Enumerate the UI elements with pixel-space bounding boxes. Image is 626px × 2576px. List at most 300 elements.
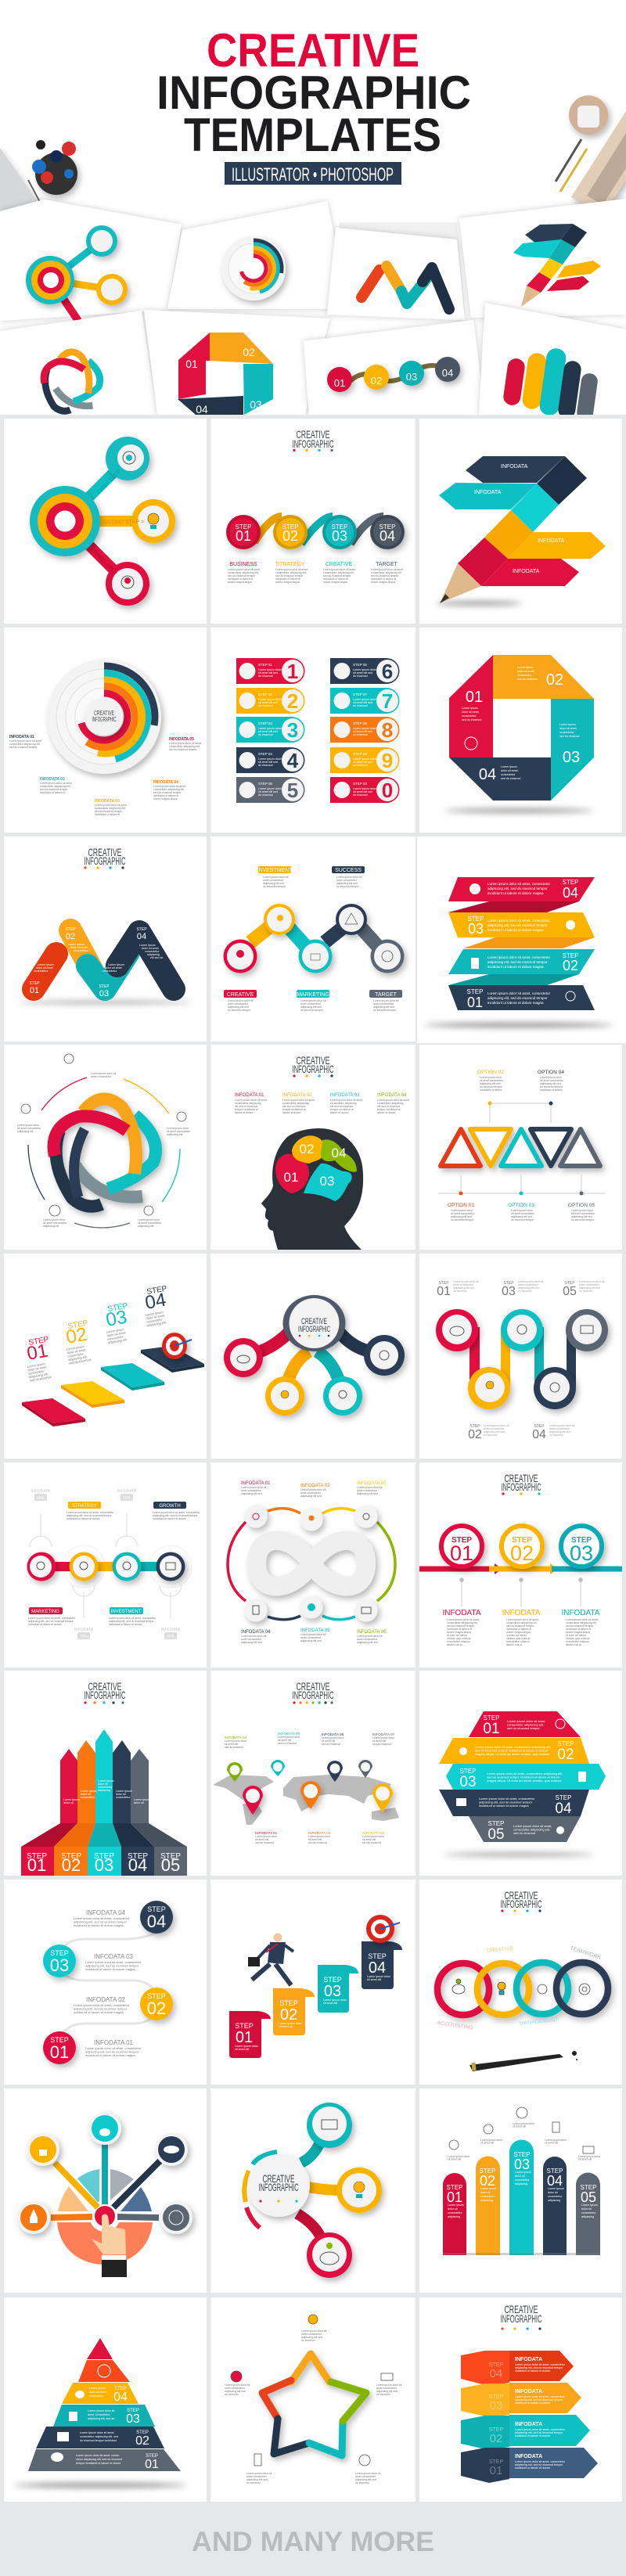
left pills: STEP 01 xyxy=(258,663,272,667)
step 02: 02 xyxy=(563,958,578,973)
layer 02: magna aliqua. Ut enim ad minim veniam, quis nostrud xyxy=(475,1752,549,1756)
level 04: 04 xyxy=(113,2391,128,2404)
location notes: sit amet elit xyxy=(308,1838,322,1841)
location notes: INFODATA 06 xyxy=(322,1732,344,1736)
infodata notes: INFODATA 05 xyxy=(300,1628,330,1633)
step labels: STEP xyxy=(564,1281,575,1286)
dark block: consectetur xyxy=(501,773,516,776)
column notes: tempor incididunt ut xyxy=(377,1108,401,1111)
star notes: adipiscing elit sed xyxy=(225,2390,246,2393)
tip xyxy=(87,2338,113,2359)
right pills: STEP 07 xyxy=(353,693,367,696)
step 02: STEP xyxy=(563,952,578,959)
heading: INFOGRAPHIC xyxy=(293,1689,333,1701)
callouts: INFODATA 05 xyxy=(169,737,194,742)
ribbon segments xyxy=(34,930,174,989)
callouts: Lorem ipsum dolor sit amet, xyxy=(169,742,202,745)
step 04 block: STEP xyxy=(489,2362,503,2368)
arrows: Lorem ipsum xyxy=(116,1790,132,1793)
ribbon labels: consectetur xyxy=(103,970,117,973)
column notes: consectetur adipiscing xyxy=(330,1102,357,1105)
step headings: STEP xyxy=(28,1336,50,1347)
location notes xyxy=(225,1732,395,1844)
tags: GROWTH xyxy=(159,1504,181,1509)
bottom options: do eiusmod tempor xyxy=(511,1218,534,1221)
tag notes xyxy=(28,1511,200,1626)
step text: STEP xyxy=(282,523,298,531)
step notes: INFODATA 02 xyxy=(86,1996,126,2003)
dark block: 04 xyxy=(479,766,496,783)
column numbers: 04 xyxy=(547,2173,563,2189)
column notes: consectetur adipiscing xyxy=(235,1102,261,1105)
satellite nodes xyxy=(224,1335,405,1416)
pencil tip xyxy=(440,563,481,603)
banner numbers: Lorem ipsum dolor xyxy=(235,2045,259,2048)
step notes: INFODATA 04 xyxy=(86,1909,126,1916)
step blocks: 01 xyxy=(27,1855,46,1875)
step notes: Lorem ipsum dolor sit amet, consectetur xyxy=(74,1916,130,1920)
ribbon labels: Lorem ipsum xyxy=(68,943,85,946)
location notes: INFODATA 05 xyxy=(278,1732,300,1736)
step 01 block: INFODATA xyxy=(515,2454,542,2459)
left pills: STEP 02 xyxy=(258,693,272,696)
column notes: labore et dolore xyxy=(235,1111,254,1114)
tags xyxy=(29,1502,186,1614)
column notes: Lorem ipsum dolor sit amet xyxy=(282,1099,315,1102)
captions: sed do eiusmod tempor xyxy=(323,574,351,577)
brain lobes xyxy=(275,1135,357,1201)
callouts: sed do eiusmod tempor xyxy=(169,748,197,751)
column notes: Lorem ipsum dolor sit amet xyxy=(330,1099,362,1102)
step 02 block xyxy=(461,2415,590,2450)
infodata notes: amet consectetur xyxy=(300,1491,322,1495)
captions: sed do eiusmod tempor xyxy=(371,574,399,577)
bottom options: sit amet consectetur xyxy=(451,1212,475,1215)
node notes xyxy=(17,1072,191,1228)
centre title xyxy=(85,698,123,736)
infodata notes: dolore magna aliqua xyxy=(566,1631,590,1634)
panel: arch columns xyxy=(419,2089,622,2293)
ribbon labels: dolor sit amet xyxy=(70,946,88,949)
curved labels: MANAGEMENT xyxy=(519,2017,559,2027)
infodata notes xyxy=(442,1609,600,1646)
top tags xyxy=(257,866,365,888)
left pills: sit amet elit sed xyxy=(258,701,278,704)
ribbon labels: consectetur xyxy=(34,970,49,973)
banner numbers: STEP xyxy=(279,1999,298,2007)
step notes: incididunt ut labore et dolore magna xyxy=(85,1967,135,1971)
step blocks: 05 xyxy=(161,1855,180,1875)
banner numbers: sit amet elit xyxy=(279,2025,293,2028)
step 02 xyxy=(448,949,595,974)
layer 03: 03 xyxy=(459,1774,477,1790)
star notes: amet consectetur xyxy=(376,2387,398,2390)
arrows: consectetur xyxy=(116,1796,131,1799)
node notes: adipiscing elit xyxy=(138,1225,153,1228)
step 03: 03 xyxy=(468,921,484,937)
orange block: consectetur xyxy=(517,674,532,677)
node notes: sit amet consectetur xyxy=(43,1221,67,1225)
top tags: do eiusmod tempor xyxy=(336,885,360,888)
heading: INFOGRAPHIC xyxy=(501,2312,541,2325)
captions: CREATIVE xyxy=(326,562,353,567)
step 01 block: incididunt ut labore et dolore xyxy=(515,2466,550,2470)
level 01 xyxy=(28,2449,181,2471)
ribbon labels: consectetur xyxy=(145,950,160,953)
tags: STRATEGY xyxy=(72,1504,97,1509)
centre node xyxy=(283,1295,346,1351)
centre disc: CREATIVE xyxy=(263,2172,294,2185)
left pills: 3 xyxy=(287,718,298,742)
panel: woven knot cycle xyxy=(4,1045,207,1250)
ribbon labels: STEP xyxy=(29,981,40,986)
node notes: Lorem ipsum dolor xyxy=(43,1218,66,1221)
sheet: woven knot xyxy=(0,311,157,415)
centre title: INFOGRAPHIC xyxy=(92,716,117,723)
infodata notes: laboris nisi ut xyxy=(447,1643,462,1646)
level 04: consectetur xyxy=(89,2394,104,2398)
step 01: 01 xyxy=(467,995,483,1010)
bottom tags: CREATIVE xyxy=(227,992,254,998)
top options: Lorem ipsum dolor xyxy=(540,1076,563,1079)
left pills xyxy=(236,658,305,803)
ring icons xyxy=(452,1979,590,1995)
infodata notes: veniam quis nostrud xyxy=(566,1637,589,1640)
concentric rings xyxy=(30,486,100,556)
step 04 block: incididunt ut labore et dolore xyxy=(515,2369,550,2373)
arrows: dolor sit xyxy=(98,1783,108,1786)
pins xyxy=(227,1760,393,1815)
column notes: elit sed do eiusmod xyxy=(330,1105,353,1108)
layer 04: Lorem ipsum dolor sit amet, consectetur xyxy=(479,1797,535,1801)
layer 01: 01 xyxy=(483,1721,500,1737)
bottom tags: Lorem ipsum dolor sit xyxy=(300,999,326,1002)
heading xyxy=(501,1889,541,1912)
location notes: Lorem ipsum dolor xyxy=(372,1736,395,1740)
centre node: CREATIVE xyxy=(301,1317,327,1326)
tag notes: Lorem ipsum dolor sit amet, consectetur xyxy=(109,1617,156,1620)
red arrow xyxy=(458,538,579,586)
infodata notes: adipiscing elit sed xyxy=(357,1492,378,1495)
top tags: Lorem ipsum dolor sit xyxy=(336,876,362,879)
step 02: Lorem ipsum dolor sit amet, consectetur xyxy=(487,955,551,959)
tag notes: adipiscing elit, sed do eiusmod tempor xyxy=(153,1514,199,1517)
panel: isometric stairs xyxy=(4,1254,207,1459)
dark arrow: INFODATA xyxy=(501,464,528,470)
infodata notes: consectetur adipiscing elit, xyxy=(506,1621,538,1624)
column numbers xyxy=(447,2151,598,2218)
callouts xyxy=(9,735,202,816)
layer 02 xyxy=(439,1738,589,1764)
infodata notes: Lorem ipsum dolor sit xyxy=(357,1486,382,1489)
location notes: sit amet elit xyxy=(362,1838,376,1841)
captions: TARGET xyxy=(376,562,398,567)
step 01 block: adipiscing elit, sed do eiusmod tempor xyxy=(515,2463,563,2466)
step text: STEP xyxy=(332,523,347,531)
column notes: elit sed do eiusmod xyxy=(377,1105,400,1108)
infodata notes: Lorem ipsum dolor sit xyxy=(357,1635,382,1638)
column notes xyxy=(235,1093,409,1114)
left pills: 1 xyxy=(287,660,298,683)
right pills: Lorem ipsum dolor xyxy=(353,757,377,761)
teal block: consectetur xyxy=(559,731,574,734)
panel: hexagon layers xyxy=(419,1671,622,1876)
footer: and many more xyxy=(0,2502,626,2576)
star notes: do eiusmod xyxy=(355,2481,369,2484)
stair steps xyxy=(22,1346,204,1427)
infodata notes: INFODATA xyxy=(442,1609,481,1617)
callouts: INFODATA 03 xyxy=(95,799,120,804)
top notes: sit amet elit xyxy=(448,2158,461,2161)
step notes: dolor sit amet, xyxy=(27,1365,48,1372)
step notes: dolor sit amet, xyxy=(67,1347,87,1355)
outer arcs xyxy=(228,1509,395,1620)
pointing hand xyxy=(92,2214,127,2277)
step notes: adipiscing elit, xyxy=(147,1320,167,1327)
captions: dolore magna aliqua xyxy=(371,581,395,584)
layer 03: sed do eiusmod tempor incididunt ut labore et dolore xyxy=(487,1775,560,1779)
step 03 block: INFODATA xyxy=(515,2389,542,2394)
nodes xyxy=(436,1309,608,1409)
level 02: 02 xyxy=(135,2434,149,2448)
ribbon labels: STEP xyxy=(99,984,110,989)
level 04: Lorem ipsum xyxy=(89,2387,106,2390)
left pills: 5 xyxy=(287,779,298,802)
bottom tags: amet consectetur xyxy=(228,1002,249,1006)
column notes: INFODATA 04 xyxy=(377,1093,407,1098)
target xyxy=(162,1333,192,1359)
column numbers: dolor sit xyxy=(581,2207,592,2211)
left pills: Lorem ipsum dolor xyxy=(258,757,282,761)
top notes: sit amet elit xyxy=(480,2141,494,2144)
running businessman xyxy=(248,1933,293,1985)
percentage labels: INFODATA xyxy=(161,1628,181,1632)
node notes: adipiscing elit xyxy=(43,1225,59,1228)
step notes: consectetur xyxy=(28,1369,45,1376)
bottom tags: adipiscing elit sed xyxy=(373,1006,394,1009)
percentage labels: INFODATA xyxy=(74,1628,94,1632)
step notes: adipiscing elit, sed do eiusmod tempor xyxy=(74,2006,128,2011)
step headings: 01 xyxy=(25,1340,49,1365)
top tags: SUCCESS xyxy=(335,868,362,873)
columns xyxy=(443,2139,600,2255)
infodata notes: dolore magna aliqua xyxy=(506,1631,531,1634)
percentage labels: 50% xyxy=(123,1496,131,1501)
star notes: do eiusmod xyxy=(301,2339,315,2342)
red block: 01 xyxy=(466,689,483,706)
captions: consectetur adipiscing elit, xyxy=(323,571,354,574)
step discs: 04 xyxy=(147,1912,166,1931)
fountain pen xyxy=(470,2051,577,2071)
layer 04 xyxy=(439,1790,589,1817)
bottom tags xyxy=(224,990,402,1012)
top options: OPTION 02 xyxy=(477,1070,504,1075)
column numbers: adipiscing xyxy=(448,2215,460,2218)
top options: incididunt ut labore xyxy=(540,1088,563,1092)
location notes: sit amet elit xyxy=(372,1740,386,1743)
location notes: INFODATA 07 xyxy=(372,1732,395,1736)
level 03: Lorem ipsum dolor sit xyxy=(88,2409,114,2412)
infodata notes: INFODATA xyxy=(502,1609,541,1617)
captions: incididunt ut labore et xyxy=(228,577,253,581)
nodes xyxy=(224,904,404,973)
step notes: adipiscing elit, xyxy=(29,1372,49,1379)
right pills: 6 xyxy=(382,660,393,683)
callouts: Lorem ipsum dolor sit amet, xyxy=(153,785,186,788)
left pills: STEP 03 xyxy=(258,721,272,725)
head silhouette xyxy=(261,1128,363,1250)
level 03 xyxy=(53,2405,155,2427)
column numbers: 05 xyxy=(581,2189,596,2205)
right pills: STEP 06 xyxy=(353,663,367,667)
level 02 xyxy=(36,2427,164,2448)
column numbers: adipiscing xyxy=(515,2182,527,2186)
step 01 xyxy=(448,985,595,1010)
captions: dolore magna aliqua xyxy=(323,581,347,584)
level 01: 01 xyxy=(145,2458,159,2471)
heading: CREATIVE xyxy=(504,1472,538,1484)
badge: illustrator photoshop xyxy=(225,162,401,185)
column numbers: STEP xyxy=(514,2151,530,2158)
banner numbers: 04 xyxy=(369,1959,386,1977)
step text: 03 xyxy=(332,528,347,544)
step 01: STEP xyxy=(467,988,483,995)
bottom options xyxy=(448,1203,595,1221)
banner numbers: STEP xyxy=(368,1952,387,1960)
location notes: Lorem ipsum dolor xyxy=(278,1736,300,1739)
captions: STRATEGY xyxy=(275,562,305,567)
step headings: STEP xyxy=(107,1302,129,1314)
step notes: adipiscing elit, sed do eiusmod tempor xyxy=(85,1964,139,1967)
step blocks: STEP xyxy=(27,1852,47,1861)
right pills: do eiusmod xyxy=(353,793,368,797)
level 01: ctetur adipiscing elit, sed do eiusmod xyxy=(76,2458,122,2461)
callouts: sed do eiusmod tempor xyxy=(153,791,182,794)
bottom options: Lorem ipsum dolor xyxy=(511,1209,534,1212)
ribbon labels: dolor sit amet xyxy=(105,966,122,970)
captions: dolore magna aliqua xyxy=(228,581,252,584)
step notes: dolor sit amet, xyxy=(106,1330,127,1337)
column numbers: STEP xyxy=(581,2184,596,2191)
orange block: dolor sit amet, xyxy=(517,670,535,673)
column numbers: 02 xyxy=(480,2173,495,2189)
teal block xyxy=(551,699,594,801)
captions: Lorem ipsum dolor sit amet, xyxy=(275,568,308,571)
node notes: sit amet consectetur xyxy=(17,1127,41,1130)
panel: linked timeline xyxy=(4,1462,207,1668)
level 02: do eiusmod tempor incididunt xyxy=(80,2439,117,2442)
curved labels xyxy=(437,1945,602,2031)
panel: hand selecting fan xyxy=(4,2089,207,2293)
connectors xyxy=(65,459,153,584)
heading: INFOGRAPHIC xyxy=(85,854,125,867)
heading: INFOGRAPHIC xyxy=(85,1689,125,1701)
heading: CREATIVE xyxy=(504,1889,538,1901)
step labels: adipiscing elit sed xyxy=(579,1286,600,1290)
step 01: Lorem ipsum dolor sit amet, consectetur xyxy=(487,991,551,995)
centre node: INFOGRAPHIC xyxy=(298,1325,330,1334)
badge: illustrator photoshop: ILLUSTRATOR • PHOTOSHOP xyxy=(232,164,394,185)
panel: brain head xyxy=(210,1045,416,1250)
level 04: dolor sit amet, xyxy=(89,2391,107,2394)
captions: incididunt ut labore et xyxy=(371,577,396,581)
infodata notes: Lorem ipsum dolor sit xyxy=(300,1488,326,1491)
tag notes: incididunt ut labore et dolore xyxy=(67,1517,100,1520)
infodata notes: exercitation ullamco xyxy=(566,1640,589,1643)
step 01: incididunt ut labore et dolore magna xyxy=(487,1001,544,1005)
step labels: amet consectetur xyxy=(484,1427,505,1430)
ribbon labels: Lorem ipsum xyxy=(108,963,124,966)
step 02 block: 02 xyxy=(490,2432,502,2445)
step labels: Lorem ipsum dolor sit xyxy=(549,1424,574,1427)
centre title: CREATIVE xyxy=(94,710,114,717)
column numbers: dolor sit xyxy=(448,2207,458,2211)
sheet: step circles: 03 xyxy=(406,371,417,383)
infodata notes: veniam quis nostrud xyxy=(506,1637,530,1640)
bottom tags: TARGET xyxy=(375,992,398,998)
top notes: Lorem ipsum dolor xyxy=(448,2155,470,2158)
location notes: Lorem ipsum dolor xyxy=(322,1736,344,1740)
layer 05: STEP xyxy=(488,1820,504,1827)
step 01: adipiscing elit, sed do eiusmod tempor xyxy=(487,996,548,1000)
arcs xyxy=(81,666,155,759)
layer 03: STEP xyxy=(460,1768,476,1775)
infodata notes: Lorem ipsum dolor sit xyxy=(241,1486,266,1489)
step labels: STEP xyxy=(534,1424,545,1429)
layer 05: sed do eiusmod xyxy=(513,1831,535,1835)
panel: M ribbon xyxy=(4,836,207,1042)
node notes: sit amet consectetur xyxy=(138,1221,162,1225)
panel: hub with four nodes xyxy=(210,1254,416,1459)
captions: consectetur adipiscing elit, xyxy=(228,571,259,574)
ribbon labels: elit sed do xyxy=(150,956,163,959)
step notes: INFODATA 01 xyxy=(94,2039,134,2046)
arrows: consectetur xyxy=(98,1786,113,1789)
step labels: amet consectetur xyxy=(579,1283,600,1286)
location notes: sed do eiusmod xyxy=(278,1742,297,1745)
layer 05: consectetur adipiscing elit, xyxy=(513,1828,550,1831)
ring numbers: STEP xyxy=(452,1536,472,1545)
level 04 xyxy=(62,2383,139,2404)
tag notes: Lorem ipsum dolor sit amet, consectetur xyxy=(153,1511,200,1514)
step notes: consectetur xyxy=(107,1334,124,1341)
panel: pencil arrows xyxy=(419,419,622,624)
step notes: adipiscing elit, xyxy=(68,1355,88,1362)
step text: 01 xyxy=(236,528,251,544)
heading xyxy=(293,1054,333,1078)
step labels: 05 xyxy=(563,1285,577,1298)
floor shadow xyxy=(444,1852,593,1857)
level 04: STEP xyxy=(114,2387,127,2391)
banner numbers: 02 xyxy=(280,2006,297,2024)
heading xyxy=(293,428,333,452)
curved labels: CREATIVE xyxy=(487,1946,514,1954)
captions: Lorem ipsum dolor sit amet, xyxy=(228,568,261,571)
star notes: adipiscing elit sed xyxy=(301,2336,322,2339)
bottom tags: Lorem ipsum dolor sit xyxy=(373,999,398,1002)
bottom options: sit amet consectetur xyxy=(571,1212,595,1215)
top tags: amet consectetur xyxy=(336,879,358,882)
step notes: consectetur xyxy=(67,1351,85,1358)
right pills: sit amet elit sed xyxy=(353,761,372,764)
star icons xyxy=(231,2315,393,2466)
right pills: Lorem ipsum dolor xyxy=(353,727,377,730)
column numbers: consectetur xyxy=(448,2211,462,2214)
step labels: STEP xyxy=(438,1281,449,1286)
desk cup with clips xyxy=(32,140,77,195)
tag notes: Lorem ipsum dolor sit amet, consectetur xyxy=(28,1617,76,1620)
step labels: 03 xyxy=(502,1285,516,1298)
